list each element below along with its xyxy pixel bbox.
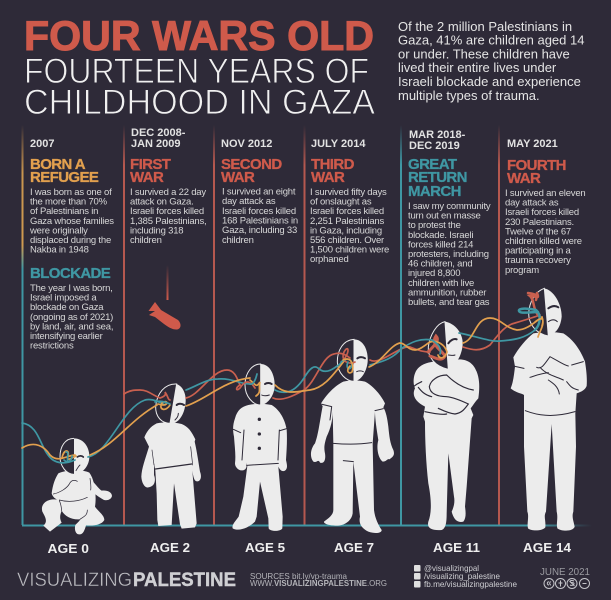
panel: great return march: ammunition, rubber — [408, 287, 486, 298]
panel: fourth war: WAR — [507, 170, 541, 187]
panel: 2007 born a refugee and blockade: Nakba in 1948 — [30, 245, 89, 256]
panel: 2007 born a refugee and blockade: BLOCKADE — [30, 265, 111, 282]
panel: second war: Israeli forces killed — [222, 206, 296, 217]
trauma threads: teal — [22, 330, 535, 463]
intro paragraph: or under. These children have — [398, 46, 570, 61]
panel: great return march: RETURN — [408, 169, 467, 186]
panel: third war: I survived fifty days — [310, 187, 387, 198]
title: FOUR WARS OLD — [24, 12, 374, 59]
panel: fourth war: MAY 2021 — [507, 138, 558, 150]
panel: second war: I survived an eight — [222, 186, 296, 198]
panel: second war: SECOND — [221, 156, 282, 173]
panel: second war: Gaza, including 33 — [222, 225, 297, 236]
timeline axes — [22, 125, 592, 526]
panel: 2007 born a refugee and blockade — [29, 138, 114, 352]
logo: Visualizing Palestine: VISUALIZING — [17, 570, 132, 591]
figure: child age 11 — [413, 322, 479, 530]
panel: first war: I survived a 22 day — [130, 187, 206, 198]
panel: 2007 born a refugee and blockade: 2007 — [30, 138, 54, 150]
panel: 2007 born a refugee and blockade: intensifying earlier — [30, 331, 103, 342]
age labels: AGE 5 — [245, 540, 285, 555]
trauma threads: orange — [22, 317, 542, 459]
intro paragraph: Of the 2 million Palestinians in — [398, 19, 572, 34]
panel: fourth war: trauma recovery — [505, 255, 571, 266]
panel: third war: Israeli forces killed — [310, 206, 384, 217]
age labels: AGE 11 — [433, 540, 480, 555]
sources — [250, 571, 387, 588]
panel: second war — [221, 138, 298, 246]
panel: 2007 born a refugee and blockade: of Palestinians in — [30, 206, 98, 217]
panel: great return march: bullets, and tear gas — [408, 297, 490, 308]
panel: 2007 born a refugee and blockade: were originally — [29, 225, 88, 236]
panel: 2007 born a refugee and blockade: the more than 70% — [30, 197, 108, 208]
panel: great return march: MAR 2018- — [409, 129, 466, 141]
panel: third war: WAR — [311, 169, 345, 186]
panel: fourth war: Twelve of the 67 — [505, 226, 571, 237]
trauma threads: red — [124, 315, 540, 399]
age labels: AGE 0 — [48, 541, 89, 556]
panel: 2007 born a refugee and blockade: blockade on Gaza — [30, 302, 104, 313]
panel: great return march: GREAT — [408, 156, 457, 173]
sources: WWW.VISUALIZINGPALESTINE.ORG — [250, 578, 387, 588]
figure: child age 2 — [141, 384, 201, 529]
panel: 2007 born a refugee and blockade: displaced during the — [30, 235, 111, 246]
panel: first war: JAN 2009 — [131, 138, 181, 150]
panel: 2007 born a refugee and blockade: Israel imposed a — [30, 293, 97, 304]
panel: second war: NOV 2012 — [221, 138, 272, 150]
panel: second war: children — [222, 235, 254, 246]
panel: fourth war: FOURTH — [507, 157, 566, 174]
icon: falling bomb — [148, 265, 181, 330]
title: FOURTEEN YEARS OF — [24, 52, 369, 91]
panel: 2007 born a refugee and blockade: BORN A — [30, 156, 86, 173]
panel: 2007 born a refugee and blockade: Gaza whose families — [30, 216, 114, 227]
panel: fourth war: day attack as — [505, 198, 559, 209]
panel: third war: 556 children. Over — [310, 235, 384, 246]
date and licence icons: JUNE 2021 — [540, 567, 590, 578]
panel: fourth war: program — [505, 265, 539, 276]
panel: second war: WAR — [221, 169, 255, 186]
sources: SOURCES bit.ly/vp-trauma — [250, 571, 347, 581]
panel: third war: JULY 2014 — [311, 138, 366, 150]
panel: fourth war — [505, 138, 586, 276]
panel: great return march: forces killed 214 — [408, 239, 473, 250]
panel: great return march: protesters, including — [408, 249, 489, 260]
panel: third war: in Gaza, including — [310, 225, 382, 236]
panel: fourth war: I survived an eleven — [505, 188, 586, 199]
panel: first war — [130, 127, 206, 246]
panel: 2007 born a refugee and blockade: REFUGEE — [30, 169, 99, 186]
panel: third war: 1,500 children were — [310, 245, 389, 256]
intro paragraph: multiple types of trauma. — [398, 88, 540, 103]
panel: great return march — [408, 129, 491, 308]
panel: first war: DEC 2008- — [131, 127, 186, 139]
figure: baby age 0 — [42, 438, 112, 534]
intro paragraph: Israeli blockade and experience — [398, 74, 581, 89]
logo: Visualizing Palestine: PALESTINE — [133, 570, 236, 591]
intro paragraph: Gaza, 41% are children aged 14 — [398, 33, 584, 48]
title: CHILDHOOD IN GAZA — [24, 83, 376, 122]
figure: child age 7 — [311, 339, 394, 533]
panel: second war: day attack as — [222, 196, 276, 207]
panel: great return march: 46 children, and — [408, 259, 472, 270]
trauma tangles in heads — [62, 293, 543, 462]
logo: Visualizing Palestine — [17, 570, 236, 591]
panel: great return march: blockade. Israeli — [408, 230, 473, 241]
panel: 2007 born a refugee and blockade: The year I was born, — [30, 283, 113, 294]
panel: great return march: injured 8,800 — [408, 268, 460, 279]
panel: 2007 born a refugee and blockade: I was born as one of — [30, 187, 112, 198]
date and licence icons — [540, 567, 590, 588]
social media handles: @visualizingpal — [424, 563, 479, 573]
panel: first war: 1,385 Palestinians, — [130, 216, 206, 227]
age labels — [48, 540, 572, 556]
age labels: AGE 2 — [150, 540, 190, 555]
panel: first war: attack on Gaza. — [130, 197, 194, 208]
age labels: AGE 7 — [334, 540, 374, 555]
panel: great return march: MARCH — [408, 183, 461, 200]
panel: first war: including 318 — [130, 225, 183, 236]
title — [24, 12, 376, 122]
panel: 2007 born a refugee and blockade: by land, air, and sea, — [30, 321, 113, 332]
panel: great return march: I saw my community — [408, 201, 491, 212]
figure: child age 14 — [511, 288, 587, 531]
panel: fourth war: Israeli forces killed — [505, 207, 579, 218]
panel: first war: FIRST — [130, 156, 171, 173]
age labels: AGE 14 — [523, 540, 572, 555]
panel: fourth war: 230 Palestinians. — [505, 217, 574, 228]
panel: third war — [310, 138, 389, 265]
figure: child age 5 — [232, 364, 287, 531]
social media handles: /visualizing_palestine — [424, 571, 500, 581]
panel: third war: of onslaught as — [310, 197, 372, 208]
panel: third war: THIRD — [311, 156, 355, 173]
panel: first war: children — [130, 235, 162, 246]
panel: great return march: to protest the — [408, 220, 461, 231]
panel: great return march: DEC 2019 — [409, 140, 460, 152]
panel: first war: WAR — [130, 169, 164, 186]
panel: great return march: turn out en masse — [408, 211, 481, 222]
social media handles: fb.me/visualizingpalestine — [424, 579, 517, 589]
panel: third war: orphaned — [310, 254, 349, 265]
panel: third war: 2,251 Palestinians — [310, 216, 384, 227]
social media handles — [414, 563, 517, 589]
panel: second war: 168 Palestinians in — [222, 216, 298, 227]
panel: first war: Israeli forces killed — [130, 206, 204, 217]
intro paragraph: lived their entire lives under — [398, 60, 557, 75]
panel: fourth war: children killed were — [505, 236, 582, 247]
panel: great return march: children with live — [408, 278, 474, 289]
panel: fourth war: participating in a — [505, 246, 571, 257]
panel: 2007 born a refugee and blockade: restrictions — [30, 341, 74, 352]
panel: 2007 born a refugee and blockade: (ongoing as of 2021) — [30, 312, 113, 323]
